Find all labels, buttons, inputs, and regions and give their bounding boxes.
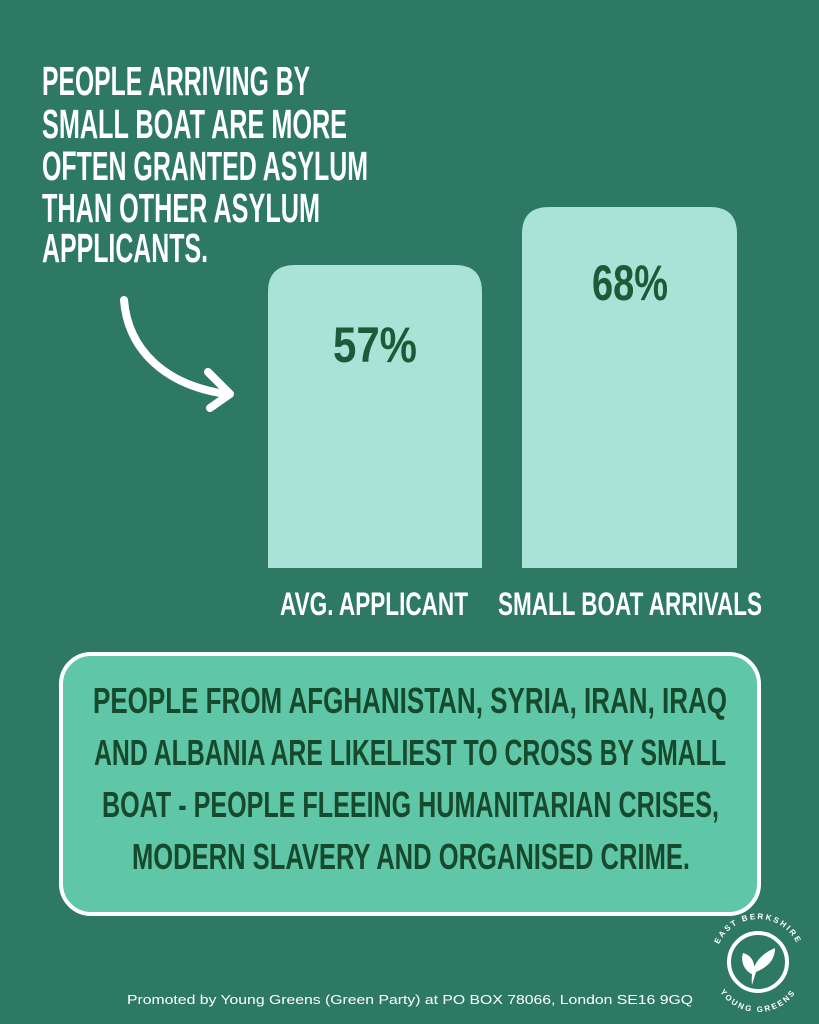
logo: YOUNG GREENS	[721, 988, 794, 1012]
title: APPLICANTS.	[42, 225, 208, 271]
footer: Promoted by Young Greens (Green Party) at PO BOX 78066, London SE16 9GQ	[127, 992, 693, 1007]
title: OFTEN GRANTED ASYLUM	[42, 143, 368, 189]
bar: small boat arrivals	[522, 207, 737, 568]
bar: small boat arrivals: 68%	[592, 255, 668, 311]
title	[42, 58, 368, 271]
logo: EAST BERKSHIRE	[714, 913, 801, 944]
bar chart	[268, 207, 762, 622]
title: SMALL BOAT ARE MORE	[42, 101, 347, 147]
bar labels: AVG. APPLICANT	[280, 586, 468, 622]
bar: avg applicant: 57%	[333, 317, 417, 373]
arrow	[124, 300, 230, 408]
logo	[714, 913, 801, 1012]
callout box	[61, 654, 759, 914]
bar: avg applicant	[268, 265, 482, 568]
bar labels	[280, 586, 762, 622]
title: PEOPLE ARRIVING BY	[42, 58, 310, 104]
title: THAN OTHER ASYLUM	[42, 185, 320, 231]
